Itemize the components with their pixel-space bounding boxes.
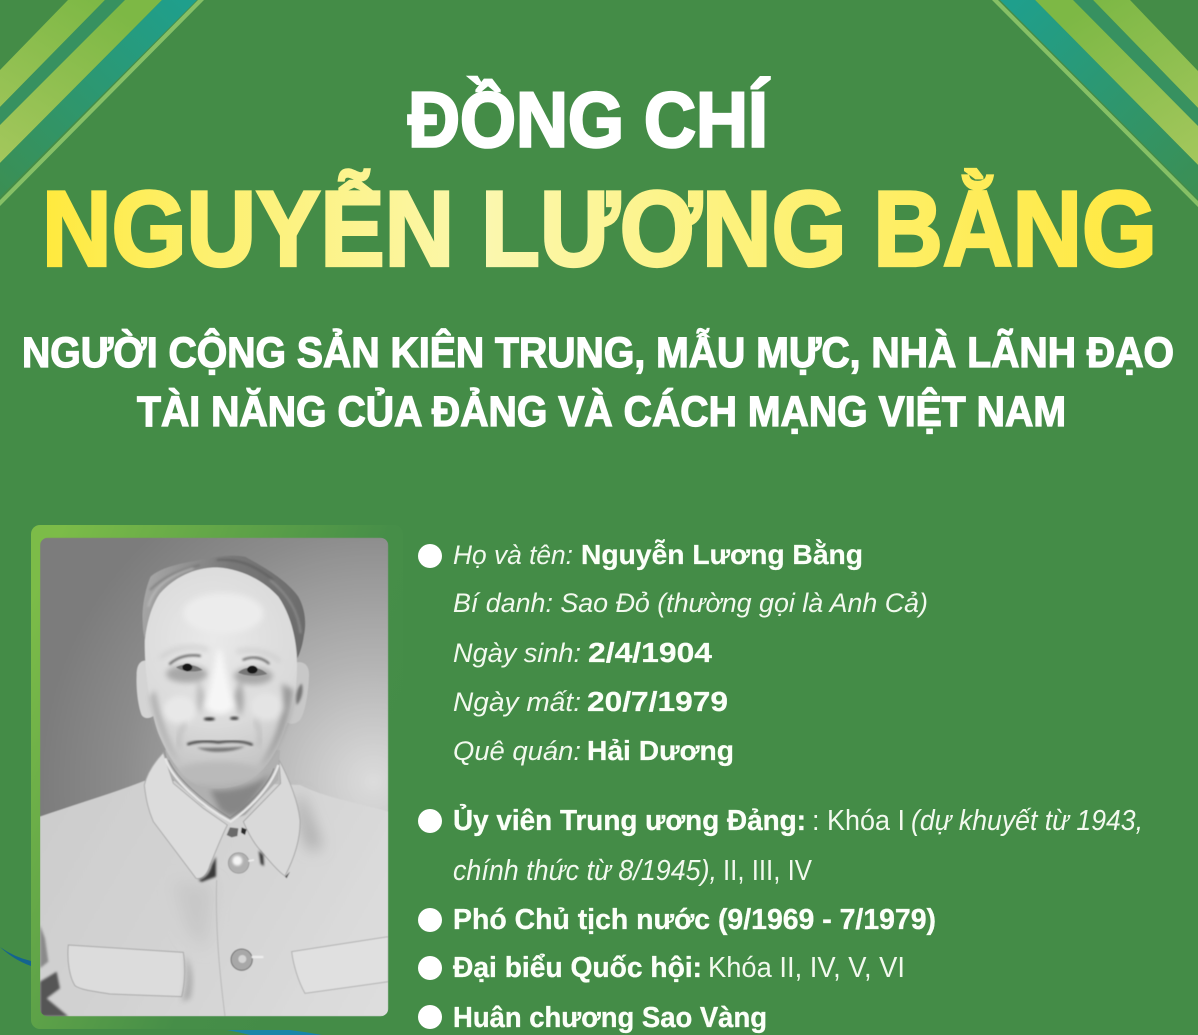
top-right corner stripes (992, 0, 1198, 207)
personal info list (418, 539, 928, 766)
left ear (136, 660, 154, 718)
jacket (40, 780, 388, 1016)
personal info list: Ngày sinh: (453, 638, 581, 668)
head (137, 556, 309, 789)
facial shading (150, 593, 293, 782)
personal info list: 20/7/1979 (587, 686, 728, 717)
personal info list: Hải Dương (587, 735, 734, 766)
jacket shading (184, 796, 325, 933)
party central committee: II, III, IV (723, 855, 813, 887)
party central committee: Ủy viên Trung ương Đảng: (453, 803, 806, 837)
hair (143, 556, 305, 658)
personal info list: Bí danh: Sao Đỏ (thường gọi là Anh Cả) (453, 588, 928, 618)
collar knot (227, 827, 247, 837)
subtitle: TÀI NĂNG CỦA ĐẢNG VÀ CÁCH MẠNG VIỆT NAM (137, 387, 1066, 436)
national assembly deputy: Đại biểu Quốc hội: (453, 952, 702, 984)
left sleeve shadow (40, 925, 68, 1016)
personal info list: 2/4/1904 (588, 637, 713, 668)
collar piping (165, 758, 278, 822)
party central committee: : Khóa I (812, 805, 905, 837)
eyes (176, 663, 267, 676)
party central committee: chính thức từ 8/1945), (453, 855, 717, 887)
neck (165, 750, 280, 820)
collar shadows (198, 851, 290, 882)
eyebrows (169, 655, 201, 664)
title: Đồng chí: ĐỒNG CHÍ (408, 76, 770, 164)
left pocket flap (68, 945, 185, 997)
vice president: Phó Chủ tịch nước (9/1969 - 7/1979) (453, 904, 936, 936)
top-left corner stripes (0, 0, 204, 206)
subtitle (22, 328, 1174, 436)
hair strands (148, 560, 301, 633)
party central committee: (dự khuyết từ 1943, (911, 805, 1143, 837)
upper button (228, 853, 254, 873)
party central committee (418, 803, 1143, 887)
gold star order: Huân chương Sao Vàng (453, 1002, 767, 1034)
portrait frame (31, 525, 403, 1029)
national assembly deputy (418, 952, 905, 984)
face (145, 567, 297, 789)
pocket shadow (182, 955, 192, 1002)
wrinkles (160, 647, 280, 662)
lower button (231, 949, 263, 970)
collar right (243, 760, 300, 876)
mouth (179, 720, 260, 752)
nose (204, 650, 239, 721)
right ear (288, 662, 309, 724)
personal info list: Quê quán: (453, 736, 581, 766)
collar (144, 753, 300, 882)
right pocket flap (292, 937, 388, 993)
collar left (144, 753, 227, 879)
portrait photo (40, 538, 388, 1016)
personal info list: Nguyễn Lương Bằng (581, 539, 863, 570)
personal info list: Ngày mất: (453, 687, 581, 717)
blue swoosh accents (0, 947, 322, 1035)
personal info list: Họ và tên: (453, 540, 573, 570)
national assembly deputy: Khóa II, IV, V, VI (708, 952, 905, 984)
placket line (216, 880, 225, 1016)
